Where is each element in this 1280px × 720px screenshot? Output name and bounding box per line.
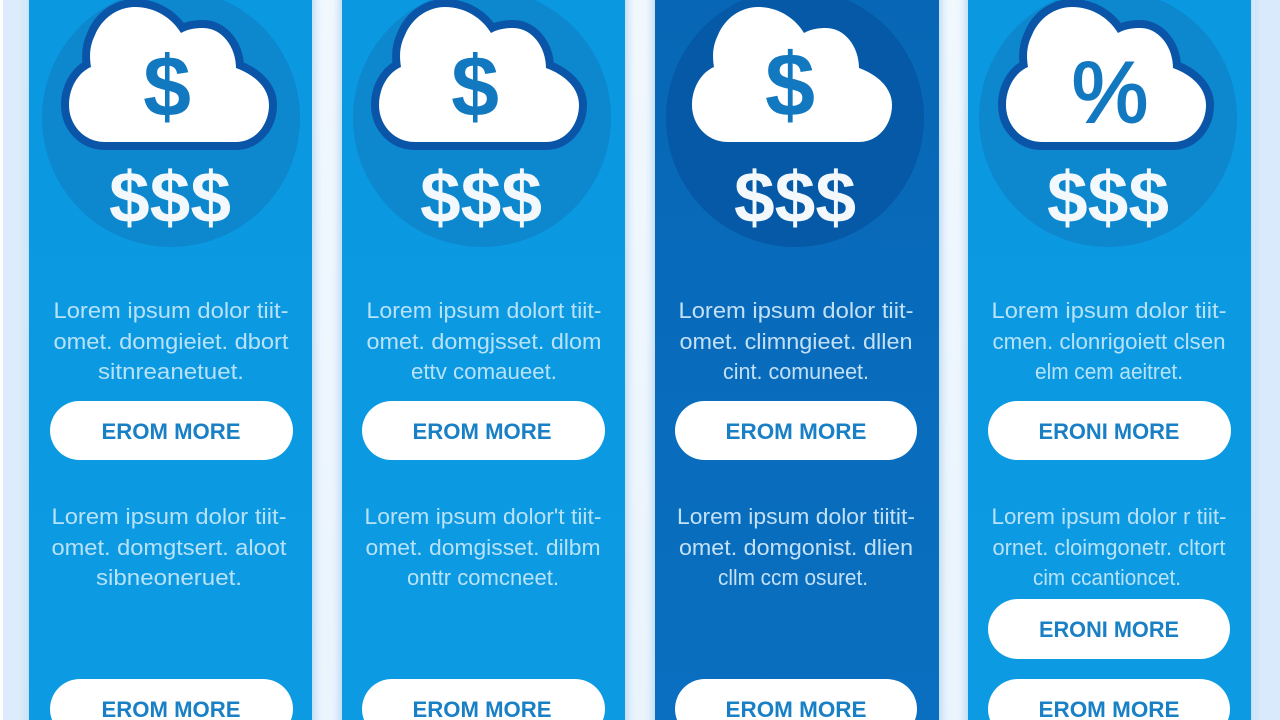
button 4a xyxy=(988,401,1231,460)
text block 4b: Lorem ipsum dolor r tiit- xyxy=(992,504,1226,529)
icon: cloud with dollar 3 xyxy=(692,7,892,142)
text block 1a: Lorem ipsum dolor tiit- xyxy=(54,298,288,323)
text block 4b: cim ccantioncet. xyxy=(1033,565,1181,590)
button 2a xyxy=(362,401,605,460)
text block 3a: omet. climngieet. dllen xyxy=(680,329,912,354)
icon: cloud with dollar 1 xyxy=(69,7,269,142)
text block 3a xyxy=(678,298,914,384)
dollar signs 1: $$$ xyxy=(109,158,231,238)
button 1b xyxy=(50,679,293,720)
button 1a xyxy=(50,401,293,460)
panel: column 3 xyxy=(655,0,939,720)
text block 3a: Lorem ipsum dolor tiit- xyxy=(678,298,914,323)
icon: circle badge 2 xyxy=(353,0,611,247)
text block 2a: Lorem ipsum dolort tiit- xyxy=(366,298,602,323)
text block 1a xyxy=(54,298,288,384)
button 1a: EROM MORE xyxy=(102,419,241,444)
text block 2b: omet. domgisset. dilbm xyxy=(366,535,600,560)
button 3a: EROM MORE xyxy=(726,419,866,444)
dollar signs 3: $$$ xyxy=(734,158,856,238)
text block 4a: elm cem aeitret. xyxy=(1035,359,1183,384)
text block 1b xyxy=(52,504,286,590)
button 3a xyxy=(675,401,917,460)
icon: circle badge 4 xyxy=(979,0,1237,247)
text block 4a xyxy=(992,298,1226,384)
text block 2a: omet. domgjsset. dlom xyxy=(366,329,602,354)
text block 2b: Lorem ipsum dolor't tiit- xyxy=(364,504,602,529)
text block 4a: cmen. clonrigoiett clsen xyxy=(992,329,1226,354)
button 4c xyxy=(988,679,1230,720)
panel: column 1 xyxy=(29,0,312,720)
icon: circle badge 1 xyxy=(42,0,300,247)
dollar signs 2: $$$ xyxy=(420,158,542,238)
button 4b xyxy=(988,599,1230,659)
text block 1b: omet. domgtsert. aloot xyxy=(52,535,286,560)
button 4b: ERONI MORE xyxy=(1039,617,1179,642)
icon: cloud with dollar 2: $ xyxy=(451,39,499,135)
icon: cloud with percent xyxy=(1006,7,1206,142)
panel: column 2 xyxy=(342,0,625,720)
text block 4b xyxy=(992,504,1226,590)
text block 2b: onttr comcneet. xyxy=(407,565,559,590)
icon: cloud with dollar 3: $ xyxy=(765,36,815,136)
text block 3b: cllm ccm osuret. xyxy=(718,565,868,590)
dollar signs 4: $$$ xyxy=(1047,158,1169,238)
text block 2a xyxy=(366,298,602,384)
text block 2b xyxy=(364,504,602,590)
text block 3b: Lorem ipsum dolor tiitit- xyxy=(677,504,915,529)
icon: cloud with dollar 2 xyxy=(379,7,579,142)
text block 1b: Lorem ipsum dolor tiit- xyxy=(52,504,286,529)
text block 1b: sibneoneruet. xyxy=(96,565,242,590)
button 3b xyxy=(675,679,917,720)
button 2b xyxy=(362,679,605,720)
text block 1a: sitnreanetuet. xyxy=(98,359,244,384)
button 4a: ERONI MORE xyxy=(1038,419,1180,444)
text block 3b: omet. domgonist. dlien xyxy=(679,535,913,560)
text block 2a: ettv comaueet. xyxy=(411,359,557,384)
button 2a: EROM MORE xyxy=(412,419,552,444)
text block 3b xyxy=(677,504,915,590)
text block 4b: ornet. cloimgonetr. cltort xyxy=(992,535,1226,560)
text block 3a: cint. comuneet. xyxy=(723,359,869,384)
icon: circle badge 3 xyxy=(666,0,924,247)
icon: cloud with percent: % xyxy=(1072,45,1148,141)
icon: cloud with dollar 1: $ xyxy=(143,39,191,135)
panel: column 4 xyxy=(968,0,1251,720)
text block 1a: omet. domgieiet. dbort xyxy=(54,329,288,354)
text block 4a: Lorem ipsum dolor tiit- xyxy=(992,298,1226,323)
